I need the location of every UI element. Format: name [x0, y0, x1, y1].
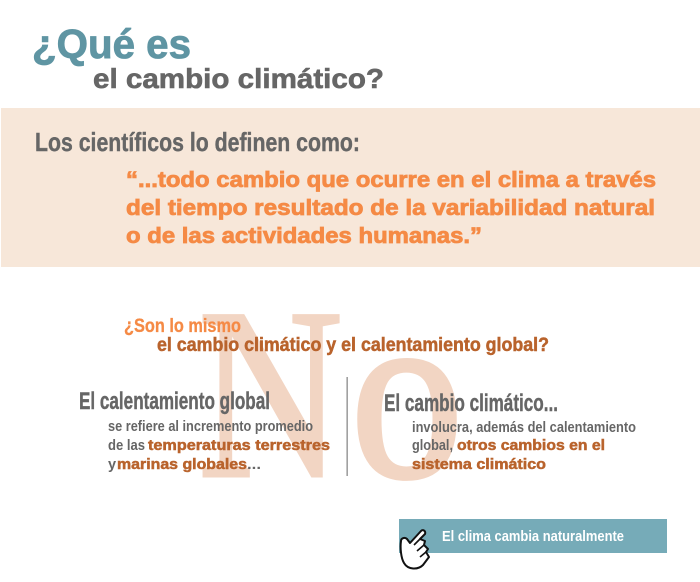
column: calentamiento global: y [108, 457, 116, 473]
column: calentamiento global: ... [247, 457, 261, 473]
column: cambio climático: El cambio climático... [384, 390, 558, 417]
big word: No: N [198, 258, 343, 529]
big word: No [198, 258, 463, 529]
column: calentamiento global [79, 388, 330, 473]
big word: No: o [351, 258, 463, 529]
panel: definition [1, 108, 700, 267]
question: el cambio climático y el calentamiento global? [157, 334, 549, 356]
divider [346, 377, 348, 476]
icon: pointing hand [401, 530, 429, 569]
question [124, 316, 549, 356]
column: calentamiento global: marinas globales [117, 457, 247, 473]
title [32, 21, 384, 94]
title: ¿Qué es [32, 21, 191, 67]
column: cambio climático: involucra, además del calentamiento [412, 420, 636, 436]
column: cambio climático: global, [412, 438, 453, 454]
column: calentamiento global: de las [108, 438, 145, 454]
column: cambio climático [384, 390, 636, 473]
quote: “...todo cambio que ocurre en el clima a través [126, 167, 656, 192]
column: calentamiento global: El calentamiento global [79, 388, 270, 415]
column: calentamiento global: se refiere al incremento promedio [108, 419, 313, 435]
quote: o de las actividades humanas.” [126, 223, 482, 248]
column: cambio climático: otros cambios en el [457, 438, 605, 454]
callout: El clima cambia naturalmente [442, 528, 624, 545]
panel heading: Los científicos lo definen como: [35, 127, 360, 157]
callout [399, 519, 667, 569]
quote: del tiempo resultado de la variabilidad natural [126, 195, 655, 220]
column: calentamiento global: temperaturas terrestres [148, 438, 330, 454]
quote [126, 167, 656, 248]
column: cambio climático: sistema climático [412, 457, 546, 473]
title: el cambio climático? [93, 63, 384, 94]
question: ¿Son lo mismo [124, 316, 241, 337]
